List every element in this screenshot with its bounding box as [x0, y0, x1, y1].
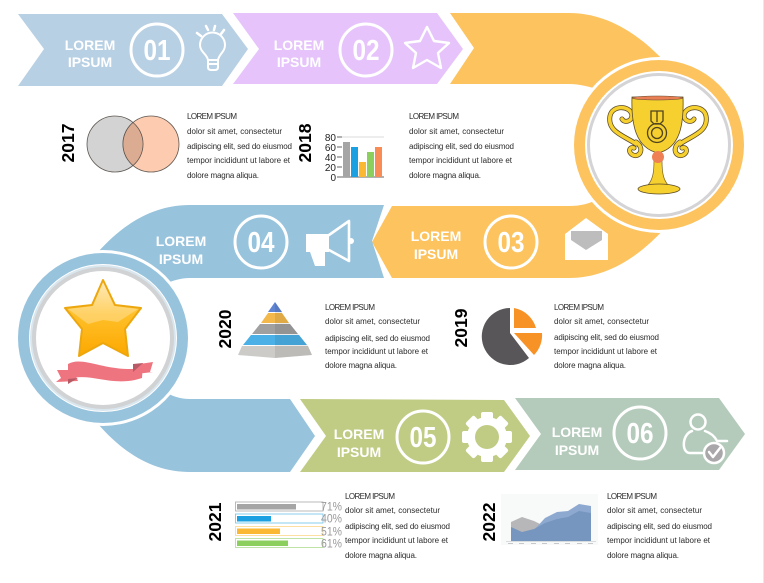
text block 2022: adipiscing elit, sed do eiusmod: [607, 522, 712, 531]
text block 2017: tempor incididunt ut labore et: [187, 156, 291, 165]
text block 2021: adipiscing elit, sed do eiusmod: [345, 522, 450, 531]
number badge 04: [235, 216, 287, 268]
text block 2022: LOREM IPSUM: [607, 492, 657, 501]
text block 2018: adipiscing elit, sed do eiusmod: [409, 142, 514, 151]
icon: gold star: [65, 280, 141, 356]
text block 2019: LOREM IPSUM: [554, 303, 604, 312]
text block 2021: tempor incididunt ut labore et: [345, 536, 449, 545]
text block 2018: dolor sit amet, consectetur: [409, 127, 504, 136]
heading: step 02: IPSUM: [277, 54, 321, 70]
year label 2021: 2021: [205, 502, 225, 541]
icon: envelope: [565, 218, 608, 260]
text block 2020: LOREM IPSUM: [325, 303, 375, 312]
text block 2017: LOREM IPSUM: [187, 112, 237, 121]
text block 2019: dolor sit amet, consectetur: [554, 317, 649, 326]
progress bars: 61%: [321, 536, 342, 550]
panel: star medallion: [15, 250, 191, 426]
text block 2019: [554, 303, 659, 370]
bar chart: 0: [330, 173, 336, 184]
number badge 06: [614, 407, 666, 459]
heading: step 06: LOREM: [552, 424, 602, 440]
bar chart: 40: [325, 153, 336, 164]
text block 2021: LOREM IPSUM: [345, 492, 395, 501]
panel: trophy medallion: [571, 57, 747, 233]
number badge 02: [340, 24, 392, 76]
heading: step 01: IPSUM: [68, 54, 112, 70]
pie chart: [482, 308, 542, 365]
bar chart: [325, 133, 384, 184]
number badge 04: 04: [248, 227, 275, 259]
progress bars: [236, 500, 342, 550]
text block 2022: dolore magna aliqua.: [607, 551, 679, 560]
text block 2021: [345, 492, 450, 560]
number badge 02: 02: [352, 35, 380, 67]
bar chart: 80: [325, 133, 336, 144]
panel: step 04 curved band: [98, 205, 384, 472]
number badge 05: 05: [410, 422, 437, 454]
text block 2017: dolor sit amet, consectetur: [187, 127, 282, 136]
heading: step 02: LOREM: [274, 37, 324, 53]
text block 2022: [607, 492, 712, 560]
icon: megaphone: [306, 221, 354, 266]
venn diagram: [87, 116, 179, 172]
panel: step 02 arrow: [233, 13, 463, 84]
text block 2020: [325, 303, 430, 370]
heading: step 03: LOREM: [411, 228, 461, 244]
year label 2018: 2018: [295, 123, 315, 162]
number badge 05: [397, 411, 449, 463]
text block 2019: dolore magna aliqua.: [554, 361, 626, 370]
text block 2018: [409, 112, 514, 180]
text block 2020: dolore magna aliqua.: [325, 361, 397, 370]
panel: step 01 arrow: [18, 14, 248, 86]
panel: step 05 arrow: [300, 399, 530, 472]
number badge 06: 06: [626, 418, 654, 450]
text block 2018: dolore magna aliqua.: [409, 171, 481, 180]
heading: step 05: IPSUM: [337, 444, 381, 460]
year label 2020: 2020: [215, 309, 235, 348]
icon: pink ribbon: [56, 362, 153, 384]
text block 2019: tempor incididunt ut labore et: [554, 347, 658, 356]
heading: step 05: LOREM: [334, 426, 384, 442]
text block 2017: dolore magna aliqua.: [187, 171, 259, 180]
text block 2017: adipiscing elit, sed do eiusmod: [187, 142, 292, 151]
text block 2022: dolor sit amet, consectetur: [607, 506, 702, 515]
progress bars: 40%: [321, 512, 342, 526]
icon: user check: [684, 414, 727, 463]
heading: step 06: IPSUM: [555, 442, 599, 458]
bar chart: 60: [325, 143, 336, 154]
text block 2019: adipiscing elit, sed do eiusmod: [554, 333, 659, 342]
text block 2018: LOREM IPSUM: [409, 112, 459, 121]
bar chart: 20: [325, 163, 336, 174]
text block 2020: dolor sit amet, consectetur: [325, 317, 420, 326]
icon: star: [405, 27, 449, 68]
text block 2022: tempor incididunt ut labore et: [607, 536, 711, 545]
icon: gear: [462, 412, 512, 462]
panel: step 06 arrow: [515, 398, 745, 470]
progress bars: 51%: [321, 524, 342, 538]
icon: light bulb: [197, 26, 225, 70]
year label 2019: 2019: [451, 308, 471, 347]
heading: step 03: IPSUM: [414, 246, 458, 262]
heading: step 01: LOREM: [65, 37, 115, 53]
year label 2017: 2017: [58, 124, 78, 162]
icon: trophy: [610, 96, 706, 194]
number badge 01: 01: [144, 35, 171, 67]
text block 2017: [187, 112, 292, 180]
text block 2020: adipiscing elit, sed do eiusmod: [325, 334, 430, 343]
text block 2020: tempor incididunt ut labore et: [325, 347, 429, 356]
heading: step 04: LOREM: [156, 233, 206, 249]
number badge 03: [485, 216, 537, 268]
number badge 03: 03: [498, 227, 524, 259]
heading: step 04: IPSUM: [159, 251, 203, 267]
text block 2018: tempor incididunt ut labore et: [409, 156, 513, 165]
year label 2022: 2022: [479, 502, 499, 541]
area chart: [501, 494, 598, 545]
pyramid chart: [238, 302, 312, 358]
panel: step 03 curved band: [372, 13, 665, 278]
number badge 01: [131, 24, 183, 76]
text block 2021: dolore magna aliqua.: [345, 551, 417, 560]
progress bars: 71%: [321, 500, 342, 514]
text block 2021: dolor sit amet, consectetur: [345, 506, 440, 515]
